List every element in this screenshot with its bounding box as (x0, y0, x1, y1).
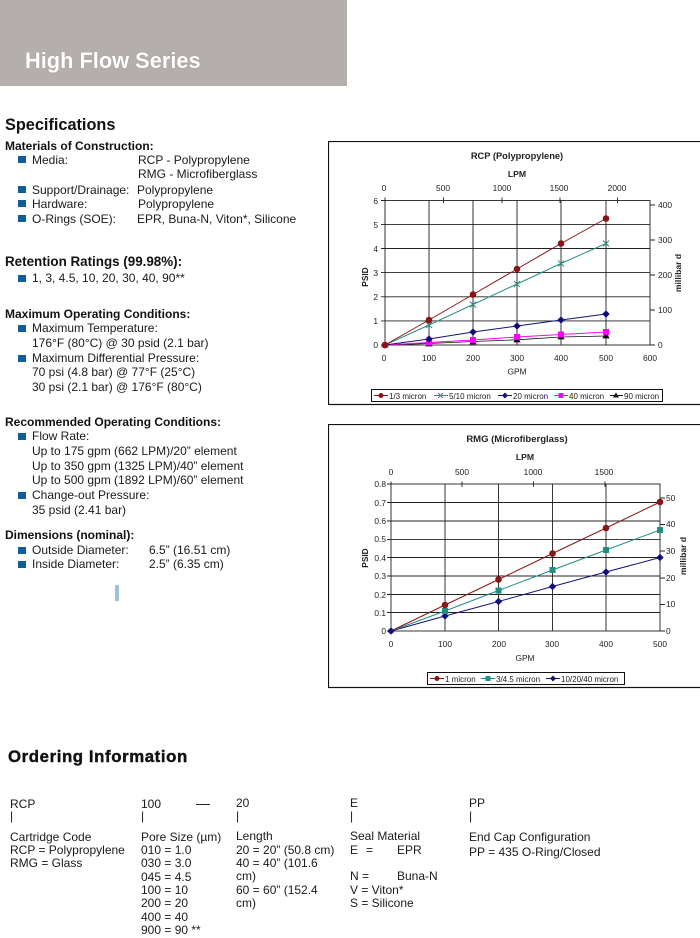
chart panel: RCP (Polypropylene): 200 (658, 270, 672, 280)
text block: maximum operating conditions: Maximum Differential Pressure: (32, 351, 199, 365)
chart panel: RMG (Microfiberglass): 30 (666, 546, 676, 556)
chart panel: RCP (Polypropylene): 1500 (550, 183, 569, 193)
chart panel: RMG (Microfiberglass): 1000 (524, 467, 543, 477)
accent bar (115, 585, 119, 601)
ordering column: pore size: 045 = 4.5 (141, 870, 191, 884)
text block: dimensions: Inside Diameter: (32, 557, 119, 571)
series: 3/4.5 micron (391, 528, 662, 631)
series: 90 micron (382, 333, 609, 347)
ordering column: cartridge code: RCP (10, 797, 35, 811)
ordering column: cartridge code: RMG = Glass (10, 856, 82, 870)
ordering column: seal material: Seal Material (350, 829, 420, 843)
ordering column: pore size: 100 = 10 (141, 883, 188, 897)
text block: dimensions: Dimensions (nominal): (5, 528, 134, 542)
chart panel: RMG (Microfiberglass): 300 (545, 639, 559, 649)
series: 1/3 micron (382, 216, 609, 348)
chart panel: RCP (Polypropylene): 300 (510, 353, 524, 363)
heading: ordering information: Ordering Information (8, 747, 188, 766)
chart panel: RMG (Microfiberglass): 0 (381, 626, 386, 636)
ordering column: length: 40 = 40” (101.6 (236, 856, 318, 870)
ordering column: seal material: E (350, 843, 358, 857)
ordering column: cartridge code (10, 797, 125, 870)
ordering column: pore size: 900 = 90 ** (141, 923, 201, 937)
ordering column: seal material: Buna-N (397, 869, 438, 883)
text block: recommended operating conditions: Change-out Pressure: (32, 488, 149, 502)
ordering column: length: | (236, 809, 239, 823)
chart panel: RMG (Microfiberglass): 0.3 (374, 571, 386, 581)
chart title: RMG (Microfiberglass) (466, 434, 568, 445)
text block: maximum operating conditions (5, 307, 209, 394)
banner title: High Flow Series (25, 48, 201, 73)
legend: 1 micron (445, 675, 476, 684)
text block: maximum operating conditions: 70 psi (4.8 bar) @ 77°F (25°C) (32, 365, 195, 379)
chart panel: RMG (Microfiberglass): 10 (666, 599, 676, 609)
ordering column: length: Length (236, 829, 273, 843)
chart title: RCP (Polypropylene) (471, 151, 563, 161)
chart panel: RMG (Microfiberglass): 0.1 (374, 608, 386, 618)
ordering column: seal material: N = (350, 869, 369, 883)
chart panel: RMG (Microfiberglass): 0.7 (374, 498, 386, 508)
legend: 1/3 micron (389, 392, 426, 401)
chart panel: RCP (Polypropylene): GPM (507, 366, 527, 376)
ordering column: length: 20 = 20” (50.8 cm) (236, 843, 334, 857)
text block: materials of construction: Support/Drainage: (32, 183, 129, 197)
ordering column: pore size: 100 (141, 797, 161, 811)
chart panel: RCP (Polypropylene): 0 (382, 183, 387, 193)
legend: 90 micron (624, 392, 659, 401)
ordering column: length: 60 = 60” (152.4 (236, 883, 318, 897)
chart panel: RMG (Microfiberglass): GPM (515, 653, 535, 663)
ordering column: length: 20 (236, 796, 249, 810)
legend: 10/20/40 micron (561, 675, 618, 684)
ordering column: end cap configuration: PP (469, 796, 485, 810)
ordering column: pore size: | (141, 809, 144, 823)
chart panel: RMG (Microfiberglass): 40 (666, 519, 676, 529)
text block: materials of construction: Hardware: (32, 197, 87, 211)
ordering column: seal material: S = Silicone (350, 896, 414, 910)
text block: recommended operating conditions: 35 psid (2.41 bar) (32, 503, 126, 517)
text block: materials of construction: Polypropylene (137, 183, 213, 197)
chart panel: RCP (Polypropylene): 3 (373, 268, 378, 278)
chart panel: RMG (Microfiberglass): 400 (599, 639, 613, 649)
ordering column: end cap configuration: PP = 435 O-Ring/Closed (469, 845, 601, 859)
ordering column: pore size: 400 = 40 (141, 910, 188, 924)
ordering column: seal material (350, 796, 438, 910)
chart panel: RCP (Polypropylene): 200 (466, 353, 480, 363)
chart panel: RCP (Polypropylene): 600 (643, 353, 657, 363)
header banner (0, 0, 347, 86)
chart panel: RCP (Polypropylene): 5 (373, 220, 378, 230)
chart panel: RMG (Microfiberglass): millibar d (678, 537, 688, 575)
chart panel: RCP (Polypropylene): 500 (599, 353, 613, 363)
chart panel: RCP (Polypropylene): 6 (373, 196, 378, 206)
chart panel: RCP (Polypropylene): PSID (360, 267, 370, 287)
chart panel: RCP (Polypropylene): 4 (373, 244, 378, 254)
text block: dimensions (5, 528, 230, 571)
text block: materials of construction: Media: (32, 153, 68, 167)
ordering column: seal material: V = Viton* (350, 883, 403, 897)
legend: 3/4.5 micron (496, 675, 540, 684)
chart panel: RCP (Polypropylene): LPM (508, 169, 526, 179)
series: 10/20/40 micron (388, 554, 663, 634)
ordering column: seal material: = (366, 843, 373, 857)
chart panel: RMG (Microfiberglass): 20 (666, 573, 676, 583)
chart panel: RCP (Polypropylene): 0 (382, 353, 387, 363)
series: 5/10 micron (385, 240, 609, 345)
chart panel: RMG (Microfiberglass): 200 (492, 639, 506, 649)
ordering column: length: cm) (236, 869, 256, 883)
legend (428, 672, 624, 684)
chart panel: RCP (Polypropylene): 400 (554, 353, 568, 363)
ordering column: pore size: Pore Size (µm) (141, 830, 221, 844)
ordering column: end cap configuration (469, 796, 601, 859)
ordering column: seal material: E (350, 796, 358, 810)
text block: maximum operating conditions: Maximum Operating Conditions: (5, 307, 190, 321)
ordering column: pore size: 200 = 20 (141, 896, 188, 910)
chart panel: RCP (Polypropylene): 1 (373, 316, 378, 326)
chart panel: RMG (Microfiberglass): 0.5 (374, 534, 386, 544)
ordering column: cartridge code: Cartridge Code (10, 830, 91, 844)
chart panel: RMG (Microfiberglass): LPM (516, 452, 534, 462)
chart panel: RCP (Polypropylene) (328, 141, 700, 406)
text block: maximum operating conditions: 30 psi (2.1 bar) @ 176°F (80°C) (32, 380, 202, 394)
text block: materials of construction: RMG - Microfiberglass (138, 167, 257, 181)
text block: dimensions: 6.5” (16.51 cm) (149, 543, 230, 557)
text block: materials of construction: RCP - Polypropylene (138, 153, 250, 167)
text block: recommended operating conditions: Up to 175 gpm (662 LPM)/20” element (32, 444, 237, 458)
chart panel: RMG (Microfiberglass) (328, 424, 700, 688)
legend: 40 micron (569, 392, 604, 401)
ordering column: length: cm) (236, 896, 256, 910)
ordering column: pore size: 030 = 3.0 (141, 856, 191, 870)
text block: materials of construction: Materials of Construction: (5, 139, 154, 153)
text block: dimensions: 2.5” (6.35 cm) (149, 557, 224, 571)
text block: maximum operating conditions: Maximum Temperature: (32, 321, 158, 335)
ordering column: seal material: EPR (397, 843, 422, 857)
chart panel: RMG (Microfiberglass): 0.6 (374, 516, 386, 526)
series: 40 micron (383, 330, 608, 347)
chart panel: RMG (Microfiberglass): 500 (455, 467, 469, 477)
chart panel: RMG (Microfiberglass): 500 (653, 639, 667, 649)
chart panel: RMG (Microfiberglass): 0.2 (374, 590, 386, 600)
legend: 5/10 micron (449, 392, 491, 401)
chart panel: RCP (Polypropylene): 400 (658, 200, 672, 210)
chart panel: RMG (Microfiberglass): PSID (360, 548, 370, 568)
text block: retention ratings: Retention Ratings (99.98%): (5, 254, 182, 269)
chart panel: RCP (Polypropylene): 0 (658, 340, 663, 350)
legend (372, 390, 662, 402)
text block: recommended operating conditions: Recommended Operating Conditions: (5, 415, 221, 429)
text block: retention ratings (5, 254, 185, 285)
separator dash (196, 804, 210, 805)
chart panel: RCP (Polypropylene): 300 (658, 235, 672, 245)
chart panel: RCP (Polypropylene): 2000 (608, 183, 627, 193)
chart panel: RMG (Microfiberglass): 50 (666, 493, 676, 503)
text block: recommended operating conditions (5, 415, 244, 517)
series: 20 micron (382, 311, 609, 348)
ordering column: cartridge code: RCP = Polypropylene (10, 843, 125, 857)
chart panel: RCP (Polypropylene): 100 (422, 353, 436, 363)
chart panel: RCP (Polypropylene): 2 (373, 292, 378, 302)
ordering column: pore size (141, 797, 221, 937)
chart panel: RMG (Microfiberglass): 0 (666, 626, 671, 636)
chart panel: RMG (Microfiberglass): 0 (389, 639, 394, 649)
text block: dimensions: Outside Diameter: (32, 543, 129, 557)
text block: maximum operating conditions: 176°F (80°C) @ 30 psid (2.1 bar) (32, 336, 209, 350)
chart panel: RMG (Microfiberglass): 0.8 (374, 479, 386, 489)
text block: recommended operating conditions: Up to 350 gpm (1325 LPM)/40” element (32, 459, 243, 473)
ordering column: end cap configuration: | (469, 809, 472, 823)
text block: recommended operating conditions: Up to 500 gpm (1892 LPM)/60” element (32, 473, 243, 487)
chart panel: RMG (Microfiberglass): 1500 (595, 467, 614, 477)
text block: materials of construction (5, 139, 296, 226)
ordering column: length (236, 796, 334, 910)
chart panel: RCP (Polypropylene): 1000 (493, 183, 512, 193)
text block: materials of construction: EPR, Buna-N, Viton*, Silicone (137, 212, 296, 226)
chart panel: RMG (Microfiberglass): 0 (389, 467, 394, 477)
ordering column: seal material: | (350, 809, 353, 823)
ordering column: pore size: 010 = 1.0 (141, 843, 191, 857)
ordering column: end cap configuration: End Cap Configuration (469, 830, 590, 844)
text block: materials of construction: Polypropylene (138, 197, 214, 211)
chart panel: RMG (Microfiberglass): 100 (438, 639, 452, 649)
text block: recommended operating conditions: Flow Rate: (32, 429, 89, 443)
text block: materials of construction: O-Rings (SOE): (32, 212, 116, 226)
ordering column: cartridge code: | (10, 809, 13, 823)
chart panel: RCP (Polypropylene): millibar d (673, 254, 683, 292)
chart panel: RMG (Microfiberglass): 0.4 (374, 553, 386, 563)
chart panel: RCP (Polypropylene): 100 (658, 305, 672, 315)
text block: retention ratings: 1, 3, 4.5, 10, 20, 30, 40, 90** (32, 271, 185, 285)
chart panel: RCP (Polypropylene): 0 (373, 340, 378, 350)
heading: specifications: Specifications (5, 116, 115, 134)
legend: 20 micron (513, 392, 548, 401)
series: 1 micron (391, 499, 663, 631)
chart panel: RCP (Polypropylene): 500 (436, 183, 450, 193)
